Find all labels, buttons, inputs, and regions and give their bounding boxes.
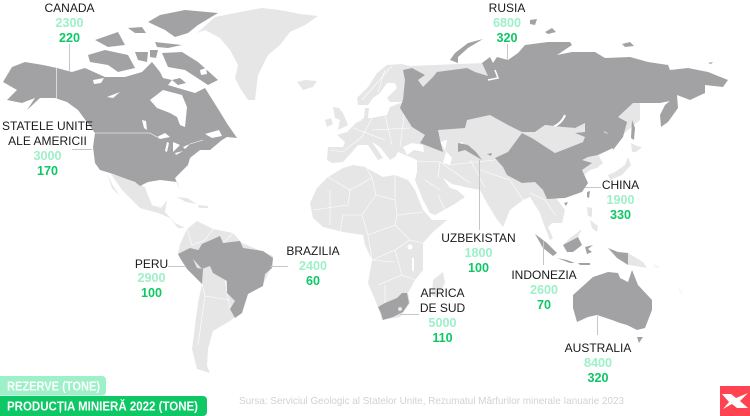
label: china: CHINA xyxy=(602,178,639,192)
label: uzbekistan: 100 xyxy=(468,261,489,275)
legend xyxy=(0,376,207,416)
landmass: central and south america xyxy=(107,174,273,373)
label: united states: STATELE UNITE xyxy=(2,119,93,133)
north american borders xyxy=(56,68,203,144)
label: brazil: BRAZILIA xyxy=(286,244,340,258)
label: canada: CANADA xyxy=(44,1,95,15)
country: peru xyxy=(178,248,203,284)
label: russia: 6800 xyxy=(493,16,521,30)
country: russia xyxy=(400,19,728,152)
label: australia xyxy=(565,341,631,385)
label: australia: 8400 xyxy=(584,356,612,370)
label: indonesia: 2600 xyxy=(530,283,558,297)
label: indonesia xyxy=(511,268,577,312)
seas and african lakes xyxy=(403,140,463,272)
label: indonesia: 70 xyxy=(537,298,551,312)
country borders xyxy=(152,66,556,345)
label: united states: 3000 xyxy=(33,149,62,163)
country: mongolia xyxy=(522,125,585,153)
label: brazil: 60 xyxy=(306,274,320,288)
label: canada xyxy=(44,1,95,45)
label: uzbekistan: UZBEKISTAN xyxy=(441,231,516,245)
legend item: mine production xyxy=(0,396,207,416)
legend item: mine production: PRODUCȚIA MINIERĂ 2022 (TONE) xyxy=(7,398,198,414)
icon: brand logo xyxy=(720,386,750,416)
landmass: eurasia xyxy=(325,60,683,294)
label: south africa: 110 xyxy=(432,331,453,345)
Lake Baikal and russian gulfs xyxy=(488,70,565,127)
label: indonesia: INDONEZIA xyxy=(511,268,577,282)
label: canada: 220 xyxy=(59,31,80,45)
country: china xyxy=(495,122,615,206)
label: united states: ALE AMERICII xyxy=(8,134,87,148)
country: brazil xyxy=(193,236,273,318)
label: canada: 2300 xyxy=(55,16,84,30)
label: china: 1900 xyxy=(606,193,635,207)
label: australia: 320 xyxy=(587,371,609,385)
label: peru xyxy=(135,257,168,300)
country: south africa xyxy=(378,293,409,320)
label: russia: 320 xyxy=(496,31,518,45)
label: brazil xyxy=(286,244,340,288)
label: china xyxy=(602,178,639,222)
legend item: reserves: REZERVE (TONE) xyxy=(7,380,100,394)
label: australia: AUSTRALIA xyxy=(565,341,631,355)
country: uzbekistan xyxy=(458,143,492,160)
canada lakes and Hudson Bay xyxy=(93,68,222,155)
label: peru: PERU xyxy=(135,257,168,271)
label: peru: 100 xyxy=(141,286,162,300)
label: russia xyxy=(489,1,525,45)
label: south africa: DE SUD xyxy=(420,301,466,315)
label: uzbekistan xyxy=(441,231,516,275)
label: south africa: AFRICA xyxy=(420,286,465,300)
label: uzbekistan: 1800 xyxy=(464,246,493,260)
country: indonesia xyxy=(535,234,628,265)
label: peru: 2900 xyxy=(137,271,166,285)
landmass: africa xyxy=(310,165,447,320)
label: united states xyxy=(2,119,93,178)
source note: Sursa: Serviciul Geologic al Statelor Unite, Rezumatul Mărfurilor minerale Ianuarie 2023 xyxy=(239,395,624,407)
label: brazil: 2400 xyxy=(299,259,327,273)
landmass: greenland and iceland xyxy=(197,8,318,100)
label: south africa: 5000 xyxy=(428,316,457,330)
country: canada and united states xyxy=(3,10,237,190)
label: china: 330 xyxy=(610,208,631,222)
legend item: reserves xyxy=(0,376,106,396)
leader lines xyxy=(70,44,601,335)
label: south africa xyxy=(420,286,466,345)
label: russia: RUSIA xyxy=(489,1,525,15)
label: united states: 170 xyxy=(37,164,58,178)
country: australia xyxy=(573,270,652,343)
